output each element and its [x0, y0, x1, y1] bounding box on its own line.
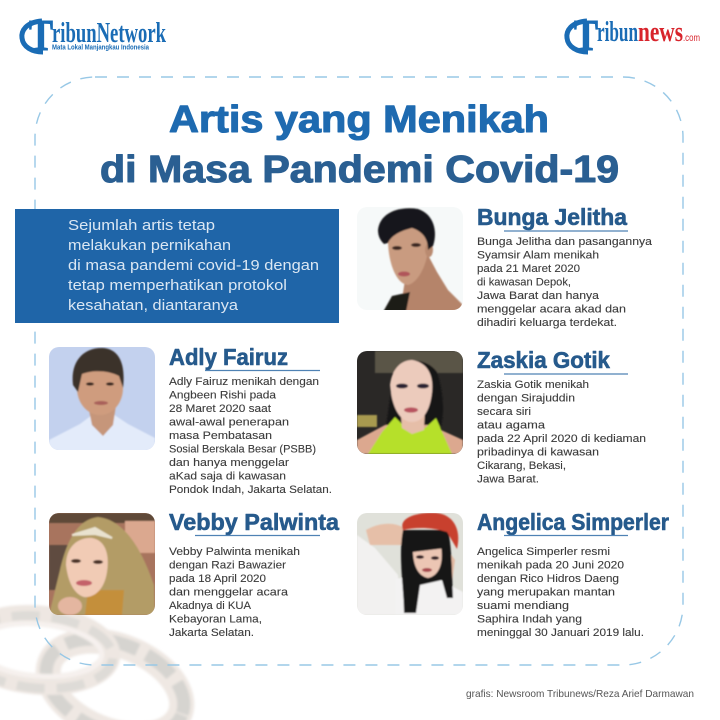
card text: Vebby Palwinta: Jakarta Selatan.	[169, 627, 254, 639]
card text: Zaskia Gotik: dengan Sirajuddin	[477, 392, 575, 404]
card text: Angelica Simperler: Angelica Simperler resmi	[477, 546, 610, 558]
card text: Angelica Simperler: menikah pada 20 Juni 2020	[477, 560, 624, 572]
logo: Tribun Network	[22, 11, 167, 60]
logo: Tribunnews.com	[567, 11, 700, 60]
card text: Vebby Palwinta: Kebayoran Lama,	[169, 614, 262, 626]
card text: Adly Fairuz: awal-awal penerapan	[169, 416, 289, 428]
card text: Bunga Jelitha: pada 21 Maret 2020	[477, 263, 580, 275]
card text: Vebby Palwinta	[169, 509, 339, 639]
card text: Angelica Simperler: meninggal 30 Januari 2019 lalu.	[477, 627, 644, 639]
card text: Zaskia Gotik	[477, 347, 646, 486]
logo: Tribunnews.com: .com	[683, 33, 700, 44]
card text: Bunga Jelitha: Bunga Jelitha	[477, 204, 627, 230]
card text: Zaskia Gotik: Zaskia Gotik menikah	[477, 379, 589, 391]
card text: Adly Fairuz: Adly Fairuz	[169, 344, 288, 370]
card text: Zaskia Gotik: Jawa Barat.	[477, 474, 539, 486]
card text: Adly Fairuz: 28 Maret 2020 saat	[169, 403, 272, 415]
card text: Zaskia Gotik: pribadinya di kawasan	[477, 446, 599, 458]
intro panel: di masa pandemi covid-19 dengan	[68, 257, 319, 274]
card text: Angelica Simperler: Saphira Indah yang	[477, 614, 582, 626]
card text: Zaskia Gotik: secara siri	[477, 406, 531, 418]
card text: Adly Fairuz	[169, 344, 332, 496]
card text: Bunga Jelitha: di kawasan Depok,	[477, 276, 571, 288]
intro panel: tetap memperhatikan protokol	[68, 277, 287, 294]
photo: Vebby Palwinta	[49, 513, 155, 615]
intro panel	[15, 209, 339, 323]
card text: Bunga Jelitha: Bunga Jelitha dan pasangannya	[477, 236, 653, 248]
card text: Angelica Simperler	[477, 509, 669, 639]
photo: Angelica Simperler	[357, 513, 463, 615]
logo: Tribun Network: Mata Lokal Manjangkau Indonesia	[52, 44, 149, 52]
card text: Angelica Simperler: dengan Rico Hidros Daeng	[477, 573, 619, 585]
card text: Vebby Palwinta: Vebby Palwinta menikah	[169, 546, 300, 558]
card text: Adly Fairuz: Adly Fairuz menikah dengan	[169, 376, 319, 388]
intro panel: Sejumlah artis tetap	[68, 217, 215, 234]
logo: Tribunnews.com: ribun	[597, 17, 638, 48]
card text: Bunga Jelitha	[477, 204, 653, 329]
logo: Tribun Network: ribunNetwork	[52, 17, 167, 49]
card text: Zaskia Gotik: pada 22 April 2020 di kediaman	[477, 433, 646, 445]
card text: Adly Fairuz: Angbeen Rishi pada	[169, 390, 277, 402]
card text: Vebby Palwinta: pada 18 April 2020	[169, 573, 266, 585]
card text: Adly Fairuz: Sosial Berskala Besar (PSBB)	[169, 444, 316, 456]
photo: Adly Fairuz	[49, 347, 155, 452]
card text: Vebby Palwinta: Vebby Palwinta	[169, 509, 339, 535]
logo: Tribun Network: T	[29, 11, 53, 60]
card text: Bunga Jelitha: Jawa Barat dan hanya	[477, 290, 600, 302]
card text: Vebby Palwinta: dengan Razi Bawazier	[169, 560, 286, 572]
photo: Bunga Jelitha	[357, 207, 463, 312]
card text: Zaskia Gotik: atau agama	[477, 420, 546, 432]
card text: Vebby Palwinta: dan menggelar acara	[169, 586, 289, 598]
card text: Vebby Palwinta: Akadnya di KUA	[169, 600, 251, 612]
card text: Angelica Simperler: yang merupakan mantan	[477, 586, 615, 598]
card text: Angelica Simperler: suami mendiang	[477, 600, 569, 612]
card text: Adly Fairuz: Pondok Indah, Jakarta Selatan.	[169, 484, 332, 496]
card text: Bunga Jelitha: dihadiri keluarga terdekat.	[477, 317, 617, 329]
card text: Adly Fairuz: masa Pembatasan	[169, 430, 272, 442]
card text: Bunga Jelitha: Syamsir Alam menikah	[477, 250, 599, 262]
card text: Adly Fairuz: aKad saja di kawasan	[169, 470, 286, 482]
title: Artis yang Menikah	[169, 99, 549, 141]
card text: Bunga Jelitha: menggelar acara akad dan	[477, 304, 626, 316]
card text: Adly Fairuz: dan hanya menggelar	[169, 457, 289, 469]
logo: Tribunnews.com: news	[638, 16, 683, 48]
intro panel: melakukan pernikahan	[68, 237, 231, 254]
logo: Tribunnews.com: T	[574, 11, 598, 60]
title: di Masa Pandemi Covid-19	[100, 149, 619, 191]
card text: Zaskia Gotik: Zaskia Gotik	[477, 347, 610, 373]
title	[100, 99, 619, 191]
dashed frame	[35, 77, 683, 665]
decorative wedding rings	[0, 610, 198, 720]
credit: grafis: Newsroom Tribunews/Reza Arief Darmawan	[466, 688, 694, 700]
card text: Angelica Simperler: Angelica Simperler	[477, 509, 669, 535]
photo: Zaskia Gotik	[357, 351, 463, 454]
intro panel: kesahatan, diantaranya	[68, 297, 239, 314]
card text: Zaskia Gotik: Cikarang, Bekasi,	[477, 460, 566, 472]
